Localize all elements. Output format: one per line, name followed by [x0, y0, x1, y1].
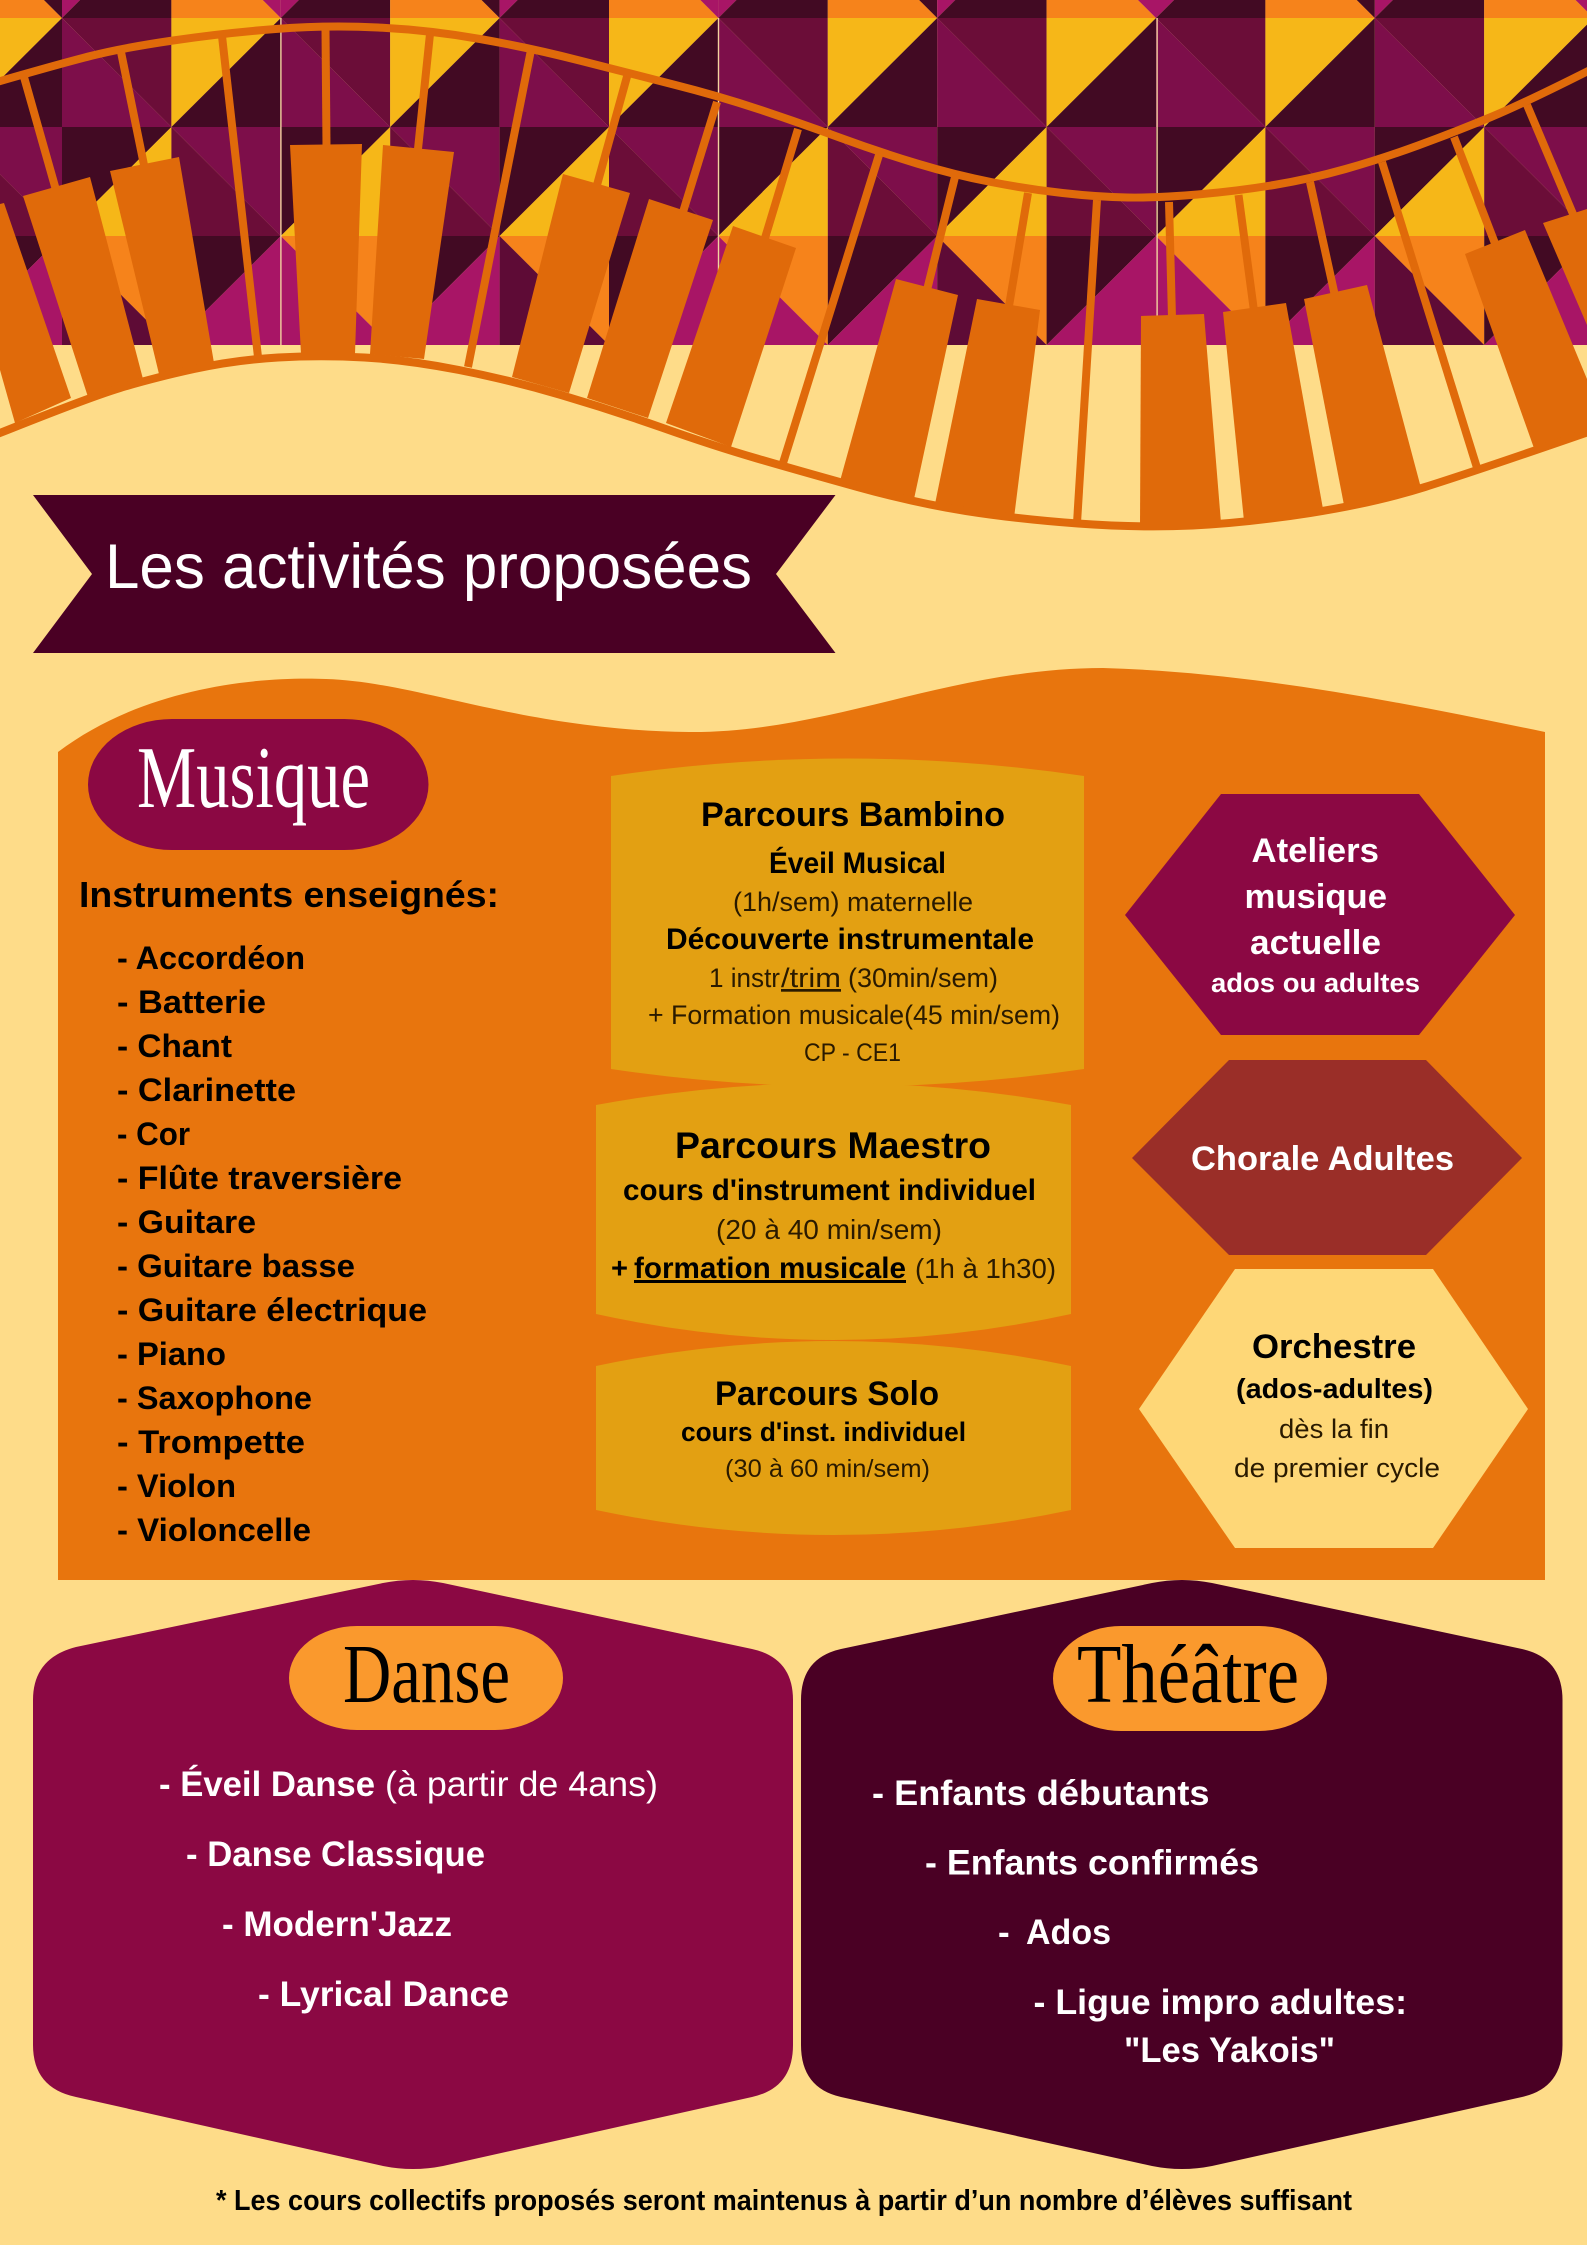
hexagon: ateliers musique actuelle: ados ou adultes: [1211, 968, 1420, 998]
parcours maestro card: cours d'instrument individuel: [623, 1174, 1036, 1207]
hexagon: ateliers musique actuelle: [1125, 794, 1515, 1035]
title banner: [33, 495, 836, 653]
parcours bambino card: [611, 758, 1084, 1086]
théâtre background shape: [801, 1580, 1562, 2169]
théâtre list: -: [998, 1913, 1010, 1952]
danse heading pill: [289, 1626, 563, 1730]
parcours bambino card: CP - CE1: [804, 1039, 901, 1067]
instruments list: - Chant: [117, 1028, 232, 1064]
danse background shape: [33, 1580, 793, 2169]
hexagon: orchestre: de premier cycle: [1234, 1453, 1440, 1483]
parcours maestro card: (20 à 40 min/sem): [716, 1214, 942, 1245]
header geometric triangle pattern: [0, 0, 1587, 345]
parcours solo card: Parcours Solo: [715, 1375, 939, 1413]
théâtre list: [872, 1774, 1407, 2070]
hexagon: orchestre: [1139, 1269, 1528, 1548]
panel: danse: [33, 1580, 793, 2169]
panel: théâtre: [801, 1580, 1562, 2169]
instruments heading: Instruments enseignés:: [79, 874, 499, 915]
instruments list: - Guitare: [117, 1204, 256, 1240]
instruments list: [117, 940, 427, 1548]
parcours maestro card: +: [611, 1253, 628, 1285]
parcours maestro card: [596, 1083, 1071, 1340]
parcours maestro card: (1h à 1h30): [915, 1253, 1056, 1284]
keyboard bottom curve: [0, 356, 1587, 526]
keyboard top curve: [0, 27, 1587, 198]
parcours maestro card: Parcours Maestro: [675, 1125, 991, 1166]
instruments list: - Clarinette: [117, 1072, 296, 1108]
danse list: [159, 1764, 658, 2014]
danse list: - Modern'Jazz: [222, 1905, 452, 1944]
théâtre heading pill: Théâtre: [1077, 1628, 1299, 1721]
parcours bambino card: 1 instr: [709, 963, 780, 993]
instruments list: - Saxophone: [117, 1380, 312, 1416]
parcours bambino card: (30min/sem): [848, 963, 998, 993]
instruments list: - Piano: [117, 1336, 226, 1372]
instruments list: - Violoncelle: [117, 1512, 311, 1548]
black keys drawn in orange: [0, 144, 1587, 526]
title text: Les activités proposées: [105, 532, 752, 602]
hexagon: ateliers musique actuelle: actuelle: [1250, 924, 1381, 962]
parcours solo card: (30 à 60 min/sem): [725, 1455, 930, 1483]
instruments list: - Trompette: [117, 1424, 305, 1460]
hexagon: orchestre: dès la fin: [1279, 1414, 1389, 1444]
danse list: (à partir de 4ans): [385, 1765, 658, 1804]
parcours bambino card: Éveil Musical: [769, 846, 946, 880]
musique heading pill: Musique: [137, 730, 370, 827]
instruments list: - Batterie: [117, 984, 266, 1020]
parcours bambino card: (1h/sem) maternelle: [733, 887, 973, 917]
danse list: - Danse Classique: [186, 1835, 485, 1874]
panel: musique: [58, 668, 1545, 1580]
hexagon: ateliers musique actuelle: Ateliers: [1252, 832, 1379, 870]
hexagon: chorale adultes: [1132, 1060, 1522, 1255]
théâtre list: - Enfants confirmés: [925, 1844, 1259, 1882]
instruments list: - Cor: [117, 1116, 190, 1152]
théâtre list: "Les Yakois": [1124, 2031, 1335, 2070]
instruments list: - Guitare basse: [117, 1248, 355, 1284]
théâtre list: - Enfants débutants: [872, 1774, 1210, 1813]
théâtre list: - Ligue impro adultes:: [1034, 1983, 1407, 2022]
danse heading pill: Danse: [343, 1628, 510, 1721]
musique heading pill: [88, 719, 428, 850]
thin key dividers: [24, 30, 1573, 523]
parcours bambino card: + Formation musicale(45 min/sem): [648, 1000, 1060, 1030]
parcours maestro card: formation musicale: [634, 1252, 906, 1285]
banner ribbon shape: [33, 495, 836, 653]
footnote: * Les cours collectifs proposés seront maintenus à partir d’un nombre d’élèves suffisant: [216, 2185, 1352, 2217]
théâtre list: Ados: [1026, 1913, 1111, 1952]
hexagon: orchestre: Orchestre: [1252, 1328, 1416, 1366]
danse list: - Lyrical Dance: [258, 1975, 509, 2014]
instruments list: - Accordéon: [117, 940, 305, 976]
hexagon: chorale adultes: Chorale Adultes: [1191, 1140, 1454, 1178]
instruments list: - Violon: [117, 1468, 236, 1504]
hexagon: orchestre: (ados-adultes): [1236, 1373, 1433, 1404]
parcours solo card: cours d'inst. individuel: [681, 1417, 966, 1447]
parcours bambino card: Découverte instrumentale: [666, 923, 1034, 956]
wavy piano keyboard: [0, 27, 1587, 526]
panel background with wavy top: [58, 668, 1545, 1580]
hexagon: ateliers musique actuelle: musique: [1244, 878, 1387, 916]
parcours solo card: [596, 1341, 1071, 1535]
parcours bambino card: Parcours Bambino: [701, 796, 1005, 834]
instruments list: - Guitare électrique: [117, 1292, 427, 1328]
parcours bambino card: /trim: [781, 963, 841, 993]
instruments list: - Flûte traversière: [117, 1160, 402, 1196]
danse list: - Éveil Danse: [159, 1764, 375, 1804]
